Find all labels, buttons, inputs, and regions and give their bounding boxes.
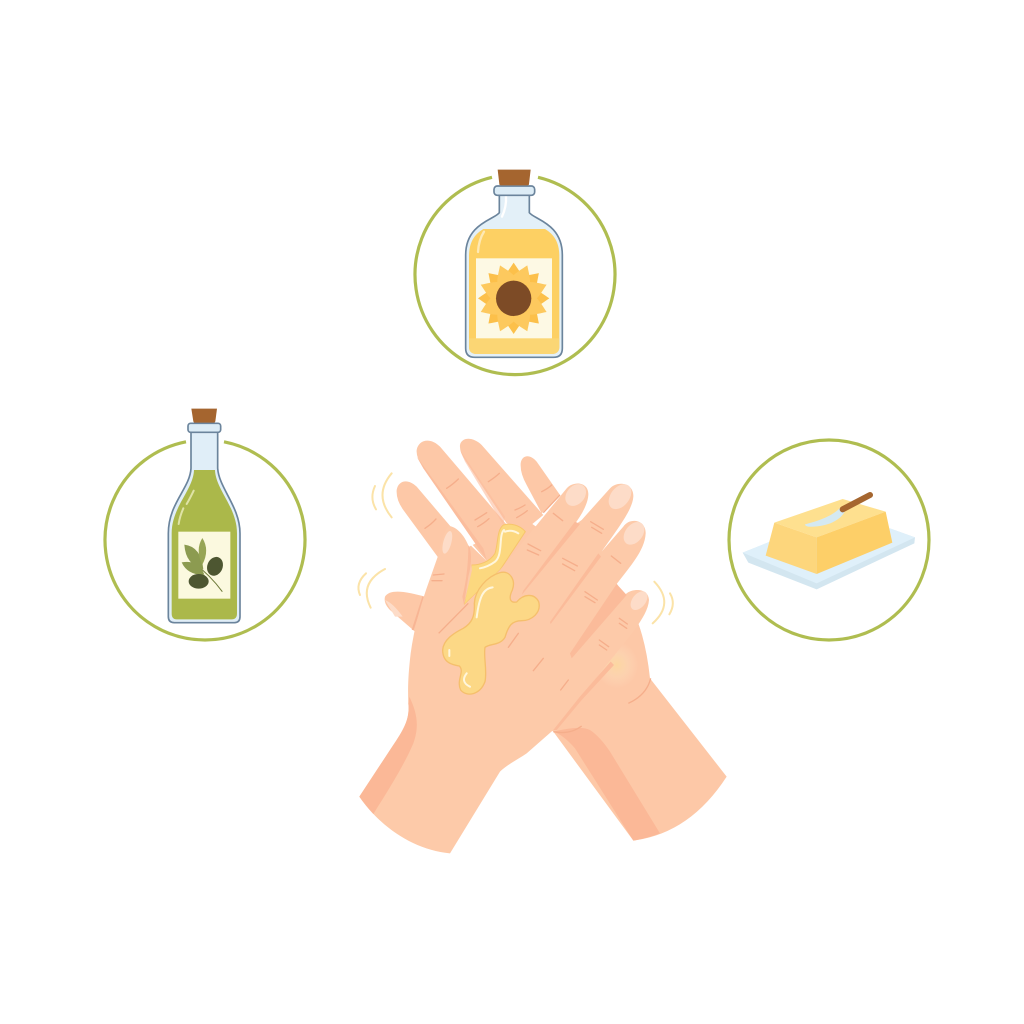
fingernails [561, 480, 590, 510]
label with olive branch [178, 532, 230, 599]
knuckle creases [432, 513, 627, 690]
label with sunflower [476, 258, 552, 338]
panel: butter [729, 440, 929, 640]
illustration: hands rubbing oil [358, 439, 727, 853]
panel: sunflower oil [415, 170, 615, 375]
motion lines [358, 473, 673, 623]
front hand [359, 480, 651, 853]
oil under the top hand [464, 524, 525, 605]
butter ring [729, 440, 929, 640]
back fingers [397, 481, 455, 560]
icon: olive oil bottle [168, 409, 240, 623]
finger shading [522, 522, 627, 658]
oil blob on the back of the hand [443, 530, 539, 694]
icon: sunflower oil bottle [466, 170, 562, 357]
olive ring [105, 442, 305, 640]
back hand [385, 439, 727, 841]
sunflower ring [415, 177, 615, 375]
panel: olive oil [105, 409, 305, 640]
icon: butter on a dish [743, 495, 915, 589]
